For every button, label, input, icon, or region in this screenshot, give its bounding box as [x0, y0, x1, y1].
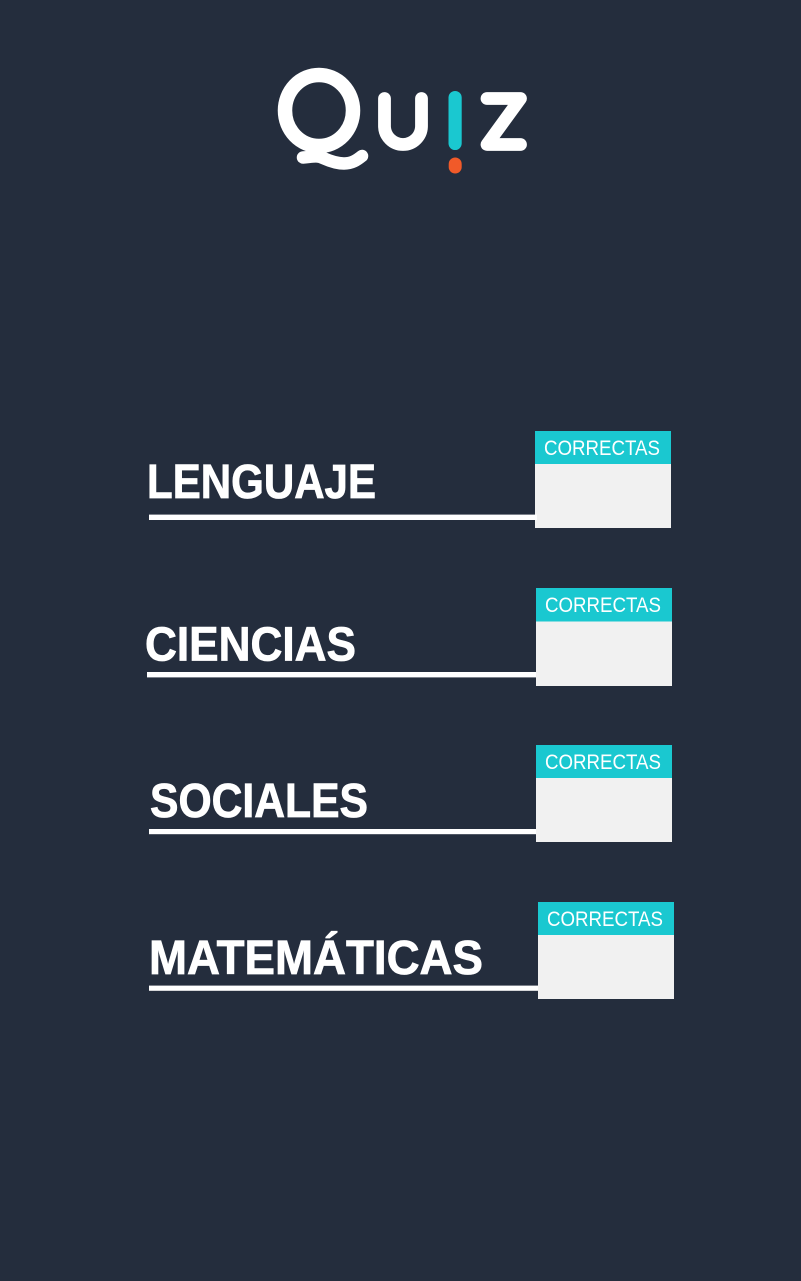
logo: Quiz: [285, 75, 520, 174]
score box: ciencias: [536, 588, 672, 686]
row: ciencias: [145, 588, 672, 686]
logo letter Q: [285, 75, 362, 164]
underline: lenguaje: [149, 515, 537, 520]
logo letter Z: [487, 98, 520, 144]
underline: sociales: [149, 829, 537, 834]
row: sociales: [149, 745, 672, 842]
score box: ciencias: CORRECTAS: [545, 593, 661, 617]
logo letter U: [384, 98, 422, 144]
heading: sociales: SOCIALES: [150, 775, 368, 828]
underline: matematicas: [149, 986, 538, 991]
score box: sociales: CORRECTAS: [545, 750, 661, 774]
score box: matematicas: [538, 902, 674, 999]
score box: matematicas: CORRECTAS: [547, 907, 663, 931]
heading: ciencias: CIENCIAS: [145, 618, 356, 672]
heading: lenguaje: LENGUAJE: [147, 456, 376, 509]
heading: matematicas: MATEMÁTICAS: [149, 931, 483, 985]
logo exclamation dot: [449, 158, 462, 174]
score box: lenguaje: CORRECTAS: [544, 436, 660, 460]
underline: ciencias: [147, 672, 536, 677]
row: matematicas: [149, 902, 674, 999]
row: lenguaje: [147, 431, 671, 528]
score box: sociales: [536, 745, 672, 842]
logo exclamation bar: [448, 91, 462, 150]
score box: lenguaje: [535, 431, 671, 528]
